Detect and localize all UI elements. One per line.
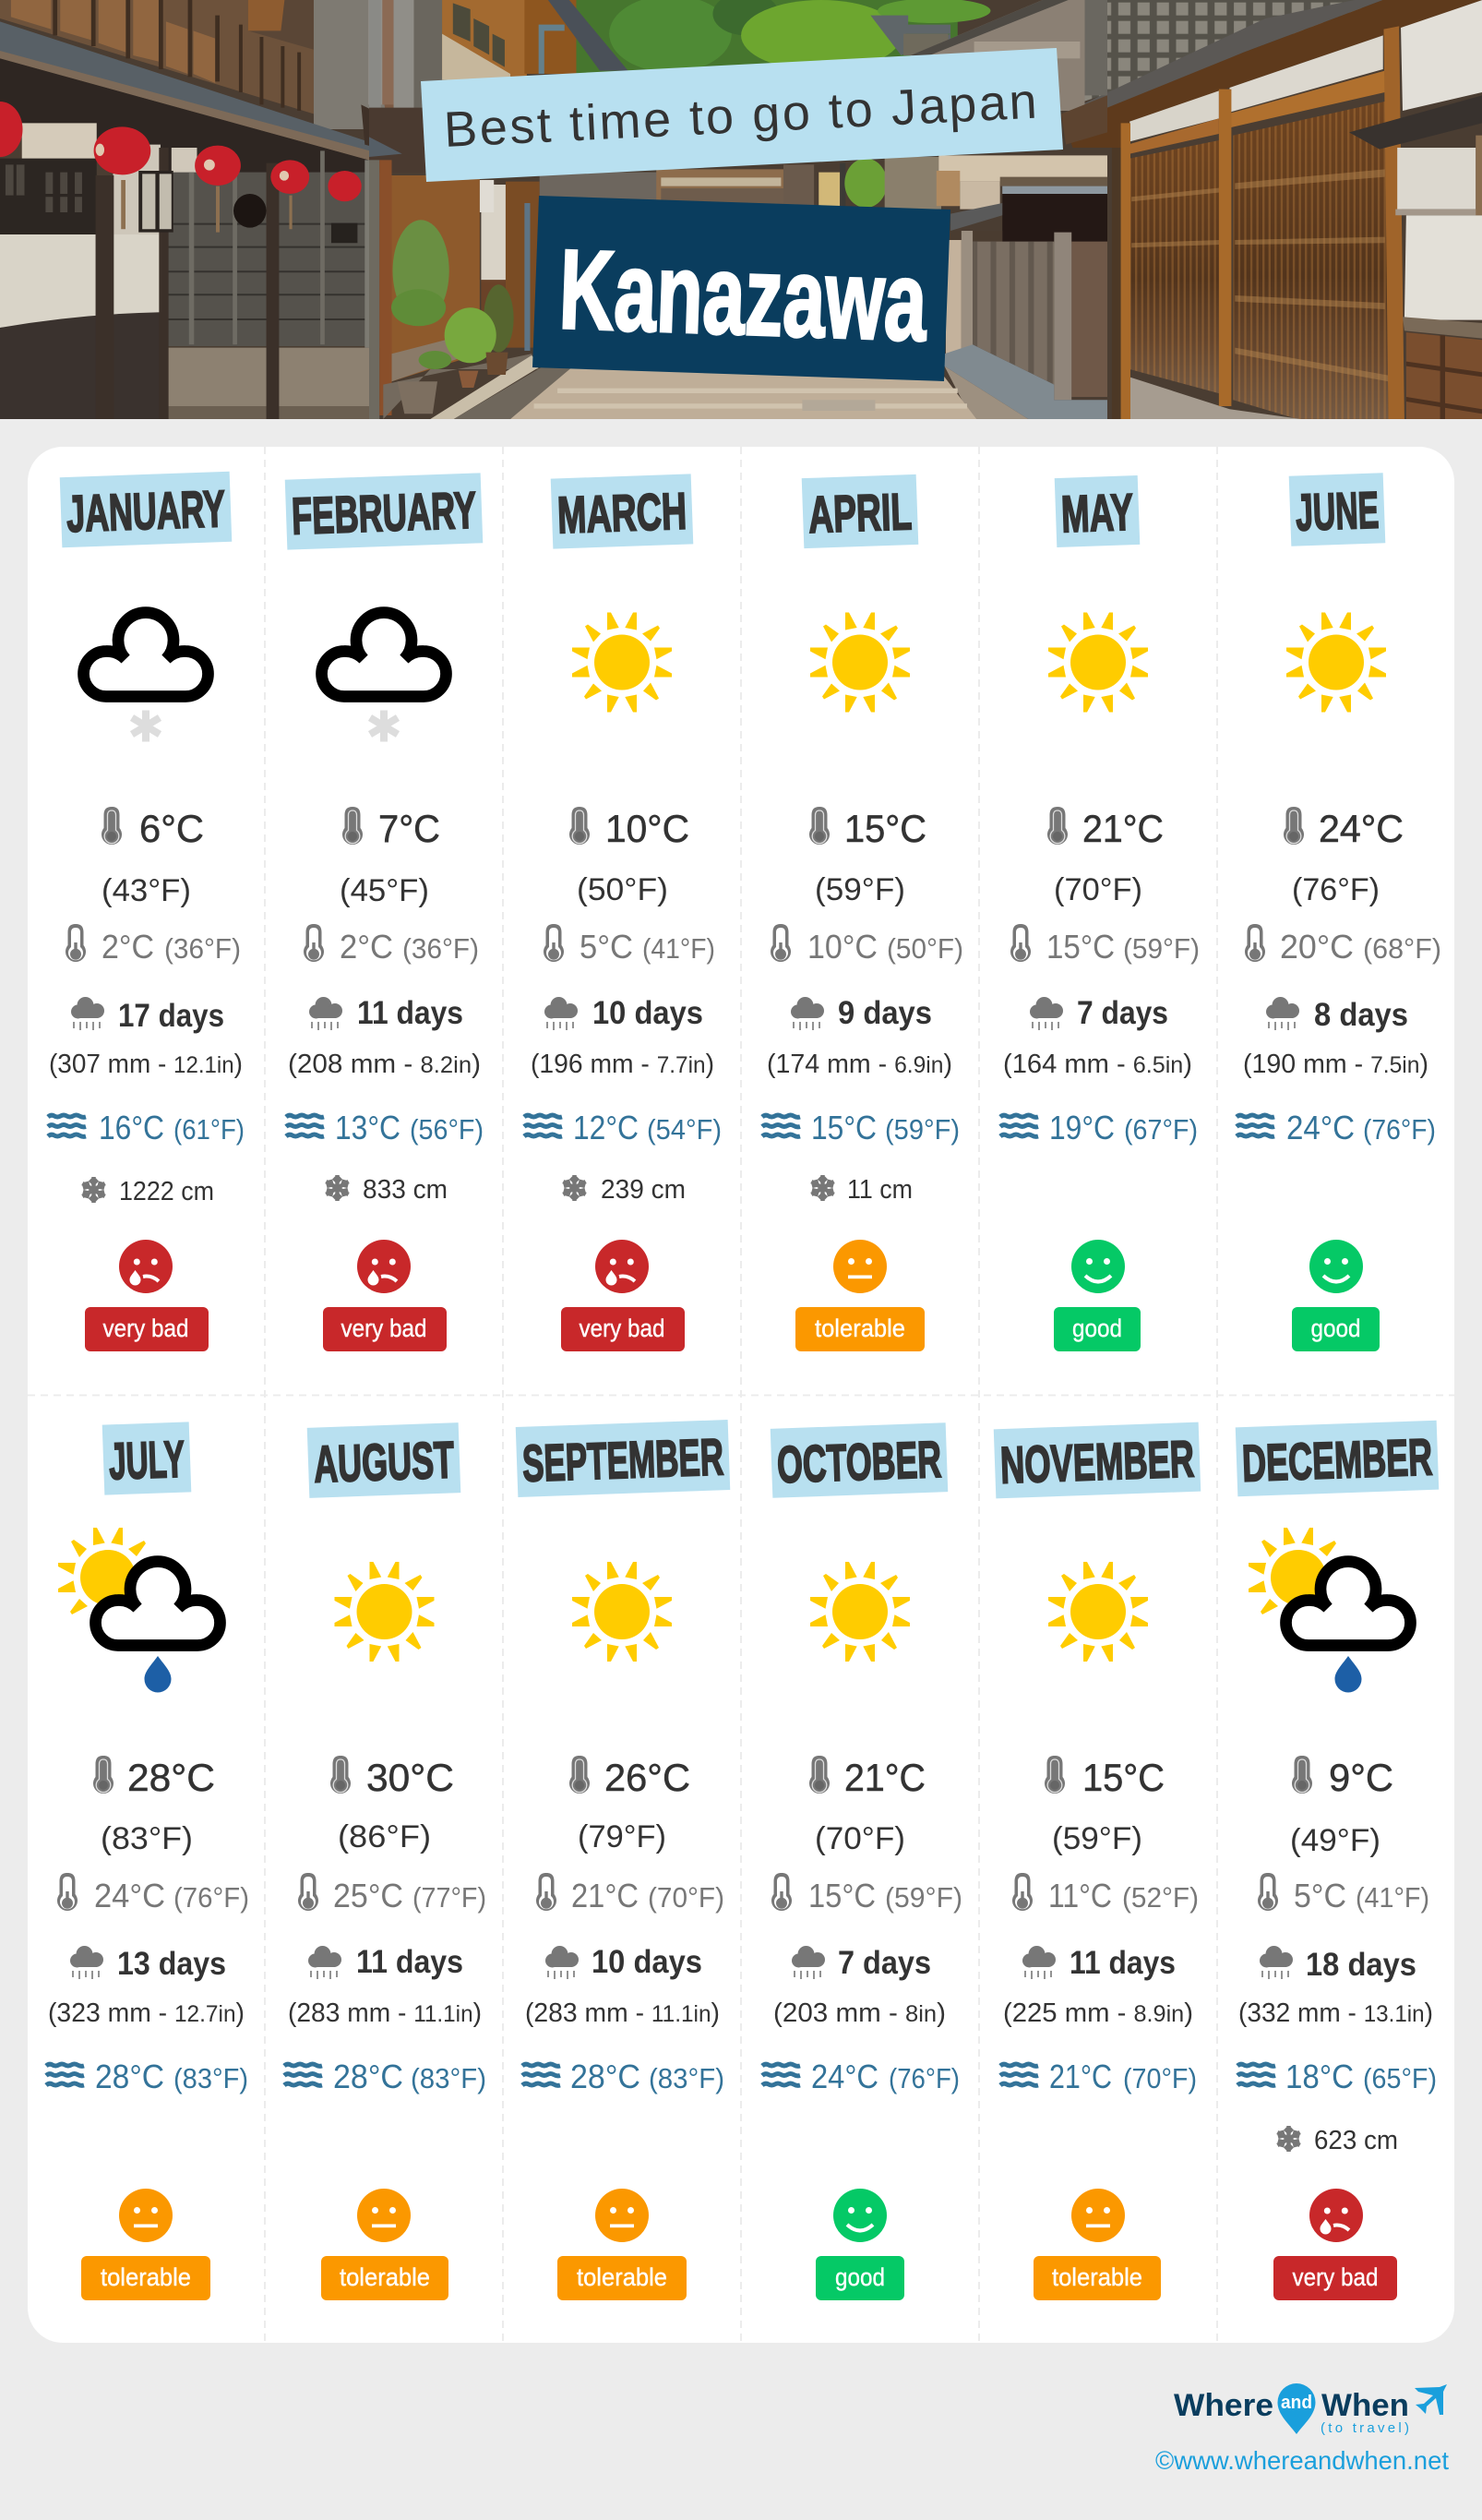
rain days: 11 days (357, 995, 463, 1031)
rating: tolerable: tolerable (577, 2263, 667, 2291)
high temperature Fahrenheit: (43°F) (102, 873, 191, 908)
icon: plane (1415, 2384, 1447, 2415)
sea temperature: 24°C (811, 2058, 878, 2095)
sea temperature: (76°F) (1363, 1113, 1436, 1146)
rain days (791, 995, 932, 1031)
low temperature (57, 1873, 249, 1914)
potted plants (391, 220, 514, 369)
label: November: NOVEMBER (999, 1429, 1195, 1494)
snowfall (561, 1175, 686, 1205)
label: November (994, 1422, 1201, 1498)
icon: sun (1286, 613, 1386, 713)
month: June (1237, 473, 1441, 1351)
rating: very bad (323, 1240, 447, 1351)
sea temperature: 13°C (335, 1109, 400, 1146)
icon: sun (810, 1562, 910, 1662)
low temperature: (36°F) (402, 932, 479, 965)
sea temperature: (56°F) (410, 1113, 484, 1146)
rainfall: (174 mm - 6.9in) (767, 1050, 952, 1079)
low temperature: 2°C (102, 928, 154, 966)
sea temperature (46, 2058, 248, 2095)
rating: tolerable: tolerable (1052, 2263, 1142, 2291)
rain days: 17 days (118, 998, 224, 1034)
low temperature (771, 924, 963, 966)
rain days: 9 days (838, 995, 932, 1031)
label: February (285, 473, 483, 550)
sea temperature: 16°C (99, 1109, 164, 1146)
icon: snow cloud (84, 613, 208, 742)
rainfall: (190 mm - 7.5in) (1243, 1050, 1428, 1079)
icon: map pin: and (1281, 2393, 1312, 2413)
low temperature (304, 924, 479, 966)
rainfall: (332 mm - 13.1in) (1238, 1998, 1433, 2028)
high temperature: 21°C (844, 1756, 926, 1799)
rating: very bad (85, 1240, 209, 1351)
sea temperature (762, 1109, 960, 1146)
rainfall: (225 mm - 8.9in) (1003, 1998, 1193, 2028)
snowfall (80, 1177, 214, 1206)
rating: very bad: very bad (1292, 2263, 1379, 2291)
rating: good (816, 2189, 904, 2300)
label: February: FEBRUARY (291, 481, 477, 545)
low temperature: (59°F) (885, 1881, 962, 1914)
snowfall (324, 1175, 448, 1205)
high temperature: 7°C (378, 807, 440, 850)
high temperature: 15°C (1082, 1756, 1165, 1799)
month: January (48, 472, 245, 1351)
icon: map pin (1277, 2383, 1316, 2434)
label: May: MAY (1060, 483, 1134, 543)
rain days: 13 days (117, 1946, 226, 1982)
month: July (46, 1422, 249, 2300)
snowfall: 239 cm (601, 1175, 686, 1205)
low temperature: 25°C (333, 1877, 403, 1914)
photo left: buildings with lanterns (0, 0, 445, 419)
high temperature Fahrenheit: (70°F) (815, 1821, 905, 1856)
month: May (1000, 475, 1200, 1351)
high temperature (809, 807, 926, 850)
high temperature Fahrenheit: (86°F) (338, 1819, 431, 1854)
rating: tolerable (557, 2189, 687, 2300)
sea temperature: 28°C (95, 2058, 164, 2095)
high temperature Fahrenheit: (83°F) (101, 1821, 193, 1856)
low temperature (298, 1873, 486, 1914)
low temperature: 10°C (807, 928, 878, 966)
low temperature: 15°C (808, 1877, 876, 1914)
sea temperature: 19°C (1049, 1109, 1115, 1146)
high temperature Fahrenheit: (79°F) (578, 1819, 666, 1854)
month: August (284, 1422, 486, 2300)
sea temperature: 28°C (333, 2058, 403, 2095)
sea temperature: (83°F) (649, 2062, 724, 2094)
high temperature (1045, 1756, 1165, 1799)
rating: tolerable (1034, 2189, 1161, 2300)
sea temperature (284, 2058, 486, 2095)
high temperature: 24°C (1319, 807, 1404, 850)
label: April (802, 474, 918, 548)
photo centre: trees, far alley, fence, paving (369, 0, 1107, 419)
rainfall: (283 mm - 11.1in) (288, 1998, 482, 2028)
icon: sun, cloud and rain (58, 1528, 220, 1693)
sea temperature: (65°F) (1363, 2062, 1437, 2094)
rating: very bad: very bad (103, 1314, 188, 1342)
sea temperature (48, 1109, 245, 1146)
logo: Where and When to travel: (to travel) (1321, 2420, 1409, 2436)
icon: snow cloud (322, 613, 446, 742)
label: August (307, 1422, 460, 1498)
low temperature (771, 1873, 962, 1914)
low temperature (536, 1873, 724, 1914)
label: August: AUGUST (313, 1430, 455, 1494)
rain days: 11 days (1070, 1945, 1176, 1981)
high temperature: 28°C (127, 1756, 215, 1799)
high temperature Fahrenheit: (50°F) (577, 872, 668, 907)
low temperature (544, 924, 715, 966)
low temperature (1258, 1873, 1429, 1914)
rainfall: (307 mm - 12.1in) (49, 1050, 243, 1079)
sea temperature (524, 1109, 722, 1146)
sea temperature: 24°C (1286, 1109, 1355, 1146)
rain days: 10 days (592, 1944, 702, 1980)
rating: tolerable (321, 2189, 448, 2300)
rain days (1030, 995, 1168, 1031)
icon: sun (810, 613, 910, 713)
logo: Where and When to travel: When (1321, 2388, 1409, 2423)
rating: very bad (561, 1240, 685, 1351)
low temperature: 5°C (1294, 1877, 1346, 1914)
sea temperature: 15°C (811, 1109, 877, 1146)
high temperature (569, 807, 689, 850)
low temperature (66, 924, 241, 966)
icon: sun, cloud and rain (1249, 1528, 1410, 1693)
month: March (524, 474, 722, 1351)
rating: tolerable: tolerable (340, 2263, 430, 2291)
sea temperature (1237, 2058, 1437, 2095)
snowfall (809, 1175, 913, 1205)
label: March (551, 474, 693, 549)
logo: Where and When to travel (1174, 2383, 1447, 2436)
low temperature (1245, 924, 1441, 966)
month: December (1236, 1421, 1439, 2300)
title banner: Best time to go to Japan: Best time to go to Japan (443, 74, 1038, 158)
title banner: Best time to go to Japan (421, 48, 1063, 182)
low temperature: 21°C (571, 1877, 639, 1914)
sea temperature (762, 2058, 960, 2095)
label: April: APRIL (807, 482, 913, 544)
rain days: 11 days (356, 1944, 463, 1980)
label: October (771, 1422, 948, 1498)
month: October (762, 1422, 962, 2300)
label: January (60, 472, 232, 547)
high temperature Fahrenheit: (59°F) (815, 872, 905, 907)
low temperature: (52°F) (1122, 1881, 1199, 1914)
high temperature: 10°C (605, 807, 689, 850)
city banner: Kanazawa (532, 196, 950, 381)
high temperature: 6°C (139, 807, 204, 850)
label: January: JANUARY (66, 479, 226, 543)
high temperature Fahrenheit: (45°F) (340, 873, 429, 908)
rating: good (1054, 1240, 1141, 1351)
rating: tolerable (81, 2189, 210, 2300)
rainfall: (208 mm - 8.2in) (288, 1050, 481, 1079)
high temperature: 21°C (1082, 807, 1164, 850)
label: June (1289, 473, 1385, 546)
low temperature: 5°C (580, 928, 633, 966)
rain days (309, 995, 463, 1031)
low temperature: 2°C (340, 928, 393, 966)
logo: Where and When to travel: Where (1174, 2388, 1273, 2423)
sea temperature (286, 1109, 484, 1146)
low temperature: (70°F) (648, 1881, 724, 1914)
high temperature Fahrenheit: (49°F) (1290, 1823, 1380, 1858)
rating: tolerable: tolerable (815, 1314, 905, 1342)
label: October: OCTOBER (776, 1430, 942, 1494)
sea temperature (1000, 1109, 1198, 1146)
sea temperature: 28°C (570, 2058, 640, 2095)
rainfall: (283 mm - 11.1in) (525, 1998, 720, 2028)
lanterns (0, 102, 362, 201)
website credit: ©www.whereandwhen.net (1155, 2446, 1449, 2475)
low temperature: 11°C (1048, 1877, 1112, 1914)
icon: sun (1048, 613, 1148, 713)
high temperature (1284, 807, 1404, 850)
sea temperature (1000, 2058, 1197, 2095)
rain days: 10 days (592, 995, 703, 1031)
label: June: JUNE (1295, 480, 1380, 542)
rating: good: good (1310, 1314, 1360, 1342)
label: May (1055, 475, 1140, 547)
low temperature: (76°F) (173, 1881, 249, 1914)
snowfall: 1222 cm (119, 1177, 214, 1206)
low temperature: 24°C (94, 1877, 165, 1914)
city banner: Kanazawa: Kanazawa (557, 226, 929, 365)
month: September (516, 1420, 730, 2300)
low temperature (1012, 1873, 1199, 1914)
sea temperature: (54°F) (647, 1113, 722, 1146)
label: September (516, 1420, 730, 1497)
snowfall: 11 cm (847, 1175, 913, 1205)
rating: very bad: very bad (580, 1314, 664, 1342)
low temperature: (41°F) (1356, 1881, 1429, 1914)
sea temperature: 21°C (1049, 2058, 1112, 2095)
icon: sun (334, 1562, 434, 1662)
rain days (792, 1945, 931, 1981)
low temperature: 20°C (1280, 928, 1354, 966)
snowfall: 623 cm (1314, 2126, 1398, 2155)
month: November (994, 1422, 1201, 2300)
sea temperature (1237, 1109, 1436, 1146)
rain days (1260, 1946, 1416, 1983)
rain days (70, 1946, 226, 1982)
month: April (762, 474, 963, 1351)
low temperature (1010, 924, 1200, 966)
label: July (102, 1422, 191, 1495)
rain days: 7 days (1077, 995, 1168, 1031)
high temperature (809, 1756, 926, 1799)
rain days (1266, 997, 1408, 1033)
rainfall: (164 mm - 6.5in) (1003, 1050, 1192, 1079)
label: September: SEPTEMBER (521, 1427, 724, 1493)
photo right: lattice house and fence (1062, 0, 1482, 419)
rainfall: (203 mm - 8in) (773, 1998, 946, 2028)
sea temperature: (67°F) (1124, 1113, 1198, 1146)
rating: tolerable (795, 1240, 925, 1351)
rainfall: (323 mm - 12.7in) (48, 1998, 245, 2028)
sea temperature: (83°F) (411, 2062, 486, 2094)
rain days (308, 1944, 463, 1980)
icon: sun (572, 1562, 672, 1662)
high temperature: 30°C (366, 1756, 454, 1799)
low temperature: (59°F) (1123, 932, 1200, 965)
sea temperature: (59°F) (885, 1113, 960, 1146)
high temperature: 9°C (1329, 1756, 1393, 1799)
sea temperature: (76°F) (889, 2062, 960, 2094)
low temperature: (77°F) (412, 1881, 486, 1914)
rain days: 7 days (838, 1945, 931, 1981)
rain days (545, 1944, 702, 1980)
panel: monthly weather table (28, 447, 1454, 2343)
sea temperature: (83°F) (173, 2062, 248, 2094)
high temperature (342, 807, 440, 850)
snowfall (1275, 2126, 1398, 2155)
snowfall: 833 cm (363, 1175, 448, 1205)
rating: good (1292, 1240, 1380, 1351)
high temperature: 26°C (604, 1756, 690, 1799)
month: February (285, 473, 484, 1351)
rainfall: (196 mm - 7.7in) (531, 1050, 714, 1079)
low temperature: 15°C (1046, 928, 1115, 966)
rain days: 8 days (1314, 997, 1408, 1033)
high temperature (1292, 1756, 1393, 1799)
rating: good: good (835, 2263, 885, 2291)
label: July: JULY (108, 1430, 185, 1490)
high temperature (1047, 807, 1164, 850)
sea temperature: 18°C (1285, 2058, 1354, 2095)
high temperature Fahrenheit: (59°F) (1052, 1821, 1142, 1856)
sea temperature: (61°F) (173, 1113, 245, 1146)
low temperature: (41°F) (642, 932, 715, 965)
rating: tolerable: tolerable (101, 2263, 191, 2291)
rating: good: good (1072, 1314, 1122, 1342)
icon: sun (572, 613, 672, 713)
sea temperature: 12°C (573, 1109, 639, 1146)
rain days (71, 997, 224, 1034)
high temperature (102, 807, 204, 850)
low temperature: (68°F) (1363, 932, 1441, 965)
high temperature Fahrenheit: (76°F) (1292, 872, 1380, 907)
rating: very bad: very bad (341, 1314, 426, 1342)
low temperature: (50°F) (887, 932, 963, 965)
photo: Kanazawa teahouse street (0, 0, 1482, 419)
rain days (544, 995, 703, 1031)
sea temperature: (70°F) (1123, 2062, 1197, 2094)
icon: sun (1048, 1562, 1148, 1662)
high temperature: 15°C (844, 807, 926, 850)
rain days (1022, 1945, 1176, 1981)
label: March: MARCH (556, 482, 687, 544)
low temperature: (36°F) (164, 932, 241, 965)
sea temperature (522, 2058, 724, 2095)
rain days: 18 days (1306, 1947, 1416, 1983)
high temperature Fahrenheit: (70°F) (1054, 872, 1142, 907)
rating: very bad (1273, 2189, 1397, 2300)
